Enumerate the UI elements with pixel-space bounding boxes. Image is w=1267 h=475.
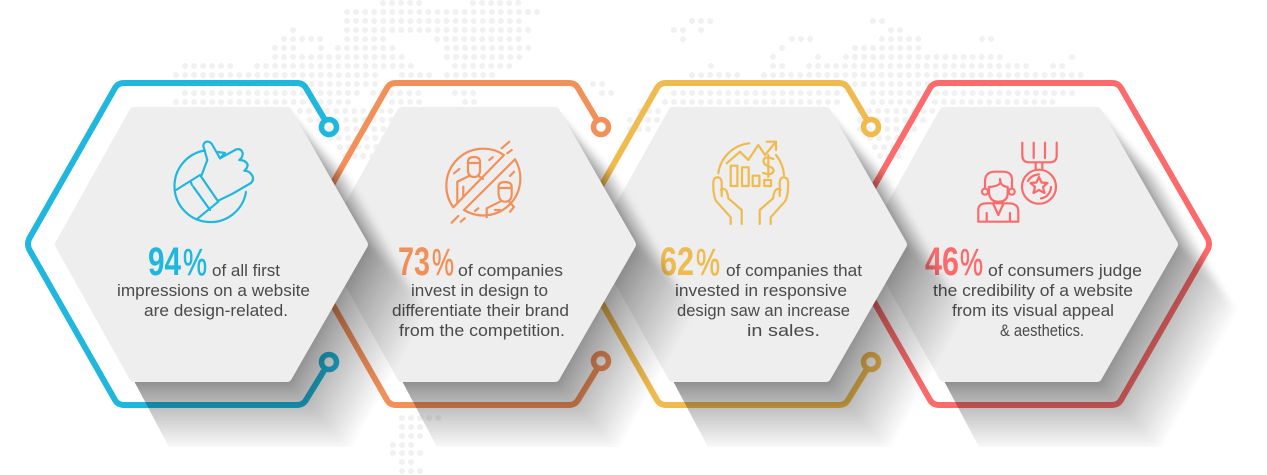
text: 94% description: of all first <box>212 262 280 280</box>
hexagon outline: orange <box>300 83 597 405</box>
text: 73% description <box>392 262 569 340</box>
connector ring: yellow top <box>864 120 878 134</box>
panel: 62% companies <box>570 83 964 448</box>
text: 94% description: are design-related. <box>144 302 288 320</box>
panel: 73% companies <box>300 83 693 448</box>
text: 62% description: of companies that <box>726 262 862 280</box>
connector ring: orange bottom <box>594 354 608 368</box>
panel: 46% consumers <box>843 83 1235 448</box>
text: 46% description <box>933 262 1142 340</box>
text: 73% description: invest in design to <box>411 282 548 300</box>
inner hexagon <box>870 112 1173 377</box>
text: 62% description: design saw an increase <box>677 302 850 320</box>
text: 46% description: from its visual appeal <box>952 302 1114 320</box>
statistic: 94%: % <box>183 242 207 284</box>
text: 62% description: invested in responsive <box>675 282 847 300</box>
connector ring: orange top <box>594 120 608 134</box>
text: 46% description: the credibility of a website <box>933 282 1133 300</box>
connector ring: blue top <box>322 120 336 134</box>
text: 73% description: differentiate their brand <box>392 302 569 320</box>
background: dotted world map <box>176 3 1081 471</box>
long shadow <box>600 108 964 448</box>
inner hexagon <box>60 112 363 377</box>
statistic: 46%: % <box>960 242 983 284</box>
long shadow <box>871 108 1235 448</box>
long shadow <box>61 108 425 448</box>
text: 62% description <box>675 262 862 340</box>
statistic: 46%: 46 <box>925 240 959 284</box>
hexagon outline: red <box>843 83 1209 405</box>
statistic: 73%: % <box>432 242 454 284</box>
panel: 94% first impressions <box>28 83 425 448</box>
text: 46% description: & aesthetics. <box>1000 322 1084 340</box>
hexagon outline: yellow <box>570 83 867 405</box>
connector ring: yellow bottom <box>864 354 878 370</box>
icon: person and medal <box>978 143 1057 222</box>
inner hexagon <box>328 112 631 377</box>
statistic: 94%: 94 <box>148 240 182 284</box>
inner hexagon <box>599 112 902 377</box>
hexagon outline: blue <box>28 83 325 405</box>
icon: thumbs up <box>174 142 253 222</box>
text: 73% description: from the competition. <box>399 322 565 340</box>
connector ring: blue bottom <box>322 354 336 370</box>
long shadow <box>329 108 693 448</box>
text: 94% description: impressions on a website <box>117 282 310 300</box>
statistic: 73%: 73 <box>398 240 430 284</box>
text: 46% description: of consumers judge <box>988 262 1142 280</box>
text: 62% description: in sales. <box>747 322 820 340</box>
statistic: 62%: % <box>696 242 720 284</box>
text: 94% description <box>117 262 310 320</box>
icon: hands holding growth chart <box>713 142 788 224</box>
statistic: 62%: 62 <box>660 240 694 284</box>
text: 73% description: of companies <box>458 262 563 280</box>
icon: two people divided by diagonal <box>446 142 520 223</box>
